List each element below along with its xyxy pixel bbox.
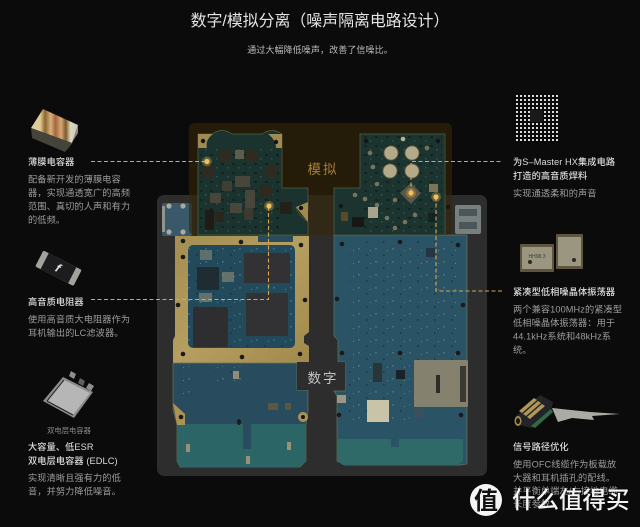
- panel: analog boards: [198, 130, 450, 235]
- icon: crystal oscillators: HH98.3: [529, 254, 546, 260]
- text: film capacitor: 的低频。: [28, 214, 65, 225]
- right main board: [334, 235, 468, 465]
- right analog board: [334, 134, 450, 235]
- icon: resistor: [35, 250, 82, 286]
- watermark logo: [470, 484, 630, 516]
- text: resistor: 耳机输出的LC滤波器。: [28, 327, 124, 338]
- text: resistor: [28, 296, 130, 338]
- text: film capacitor: 薄膜电容器: [28, 156, 74, 167]
- icon: audio jack with cables: [514, 395, 620, 428]
- text: signal path: 大器和耳机插孔的配线。: [513, 472, 615, 483]
- text: signal path: 信号路径优化: [513, 441, 569, 452]
- title: 数字/模拟分离（噪声隔离电路设计）: [191, 12, 449, 30]
- text: EDLC: 双电层电容器 (EDLC): [28, 455, 118, 466]
- text: signal path: [513, 441, 618, 509]
- left analog board: [198, 130, 308, 235]
- text: oscillators: 44.1kHz系统和48kHz系: [513, 330, 611, 342]
- watermark logo: 值: [474, 488, 498, 515]
- text: solder: [513, 156, 615, 198]
- left side tab: [162, 203, 192, 236]
- label: analog: 模拟: [308, 162, 338, 177]
- text: EDLC: 双电层电容器: [47, 426, 92, 435]
- watermark logo: 什么值得买: [512, 487, 630, 513]
- panel: digital zone backdrop: [157, 195, 487, 476]
- usb connector: [455, 205, 481, 234]
- text: solder: 实现通透柔和的声音: [513, 188, 597, 198]
- text: oscillators: 紧凑型低相噪晶体振荡器: [513, 286, 615, 297]
- text: EDLC: 实现清晰且强有力的低: [28, 472, 121, 483]
- text: film capacitor: 器，实现通透宽广的高频: [28, 187, 130, 198]
- panel: analog zone overlay: [189, 123, 452, 235]
- text: oscillators: 低相噪晶体振荡器：用于: [513, 317, 615, 328]
- text: solder: 打造的高音质焊料: [513, 170, 587, 181]
- icon: film capacitor: [31, 109, 78, 152]
- text: film capacitor: [28, 156, 130, 225]
- text: oscillators: 两个兼容100MHz的紧凑型: [513, 304, 622, 314]
- text: oscillators: 统。: [513, 344, 532, 355]
- text: EDLC: [28, 426, 121, 496]
- label: digital: 数字: [308, 371, 338, 386]
- S-Master chip: [400, 183, 421, 204]
- capacitors: [383, 146, 419, 178]
- text: signal path: 使用OFC线缆作为板载放: [513, 458, 616, 470]
- icon: resistor: f: [53, 261, 64, 276]
- text: resistor: 高音质电阻器: [28, 296, 84, 307]
- text: solder: 为S–Master HX集成电路: [513, 156, 615, 167]
- text: signal path: 长度参数。: [513, 498, 559, 509]
- icon: crystal oscillators: [520, 234, 583, 272]
- left lower board: [173, 363, 308, 467]
- icon: solder ball grid: [516, 95, 560, 142]
- subtitle: 通过大幅降低噪声，改善了信噪比。: [247, 44, 393, 55]
- text: signal path: 并平衡单端左/右接地电缆: [513, 485, 618, 496]
- icon: EDLC: [43, 371, 94, 418]
- panel: circuit boards: [162, 203, 481, 467]
- text: EDLC: 音，并努力降低噪音。: [28, 486, 121, 496]
- leader lines: [91, 156, 502, 300]
- text: EDLC: 大容量、低ESR: [28, 441, 94, 452]
- text: oscillators: [513, 286, 622, 355]
- text: resistor: 使用高音质大电阻器作为: [28, 314, 130, 324]
- text: film capacitor: 配备新开发的薄膜电容: [28, 174, 121, 184]
- text: film capacitor: 范围、真切的人声和有力: [28, 200, 130, 212]
- left gold shield board: [173, 233, 309, 363]
- label: digital: [297, 362, 345, 390]
